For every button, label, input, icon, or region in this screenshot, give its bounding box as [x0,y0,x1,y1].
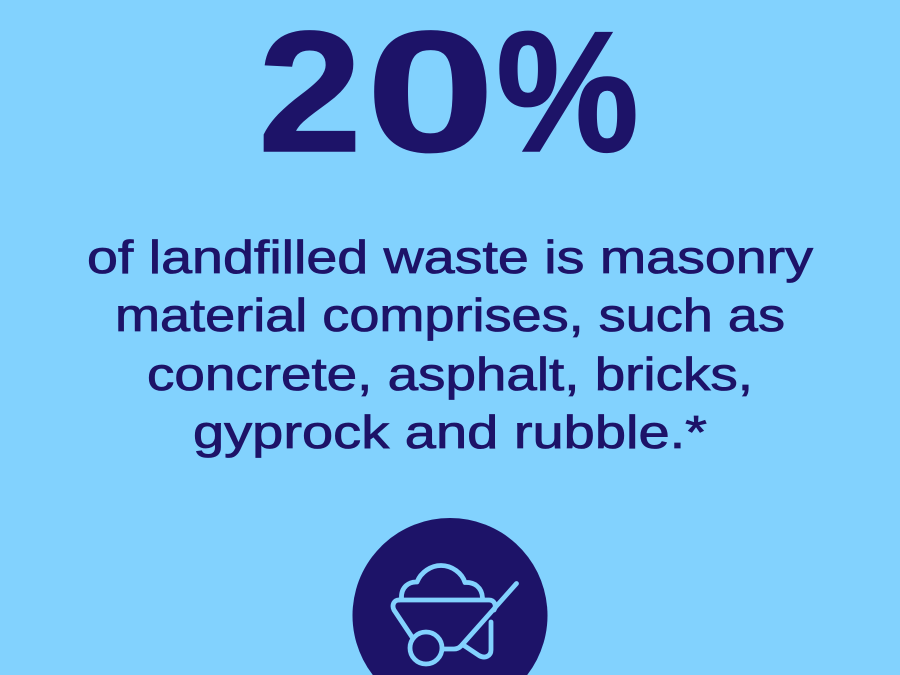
title: 20%: 2 [258,0,362,188]
text block: description: gyprock and rubble.* [193,406,707,458]
title: 20%: 0 [366,0,495,188]
text block: description: material comprises, such as [115,289,785,341]
text block: description [87,231,813,458]
text block: description: of landfilled waste is masonry [87,231,813,283]
text block: description: concrete, asphalt, bricks, [147,348,753,400]
title: 20%: % [496,0,639,188]
icon: wheelbarrow in circle [352,518,548,675]
